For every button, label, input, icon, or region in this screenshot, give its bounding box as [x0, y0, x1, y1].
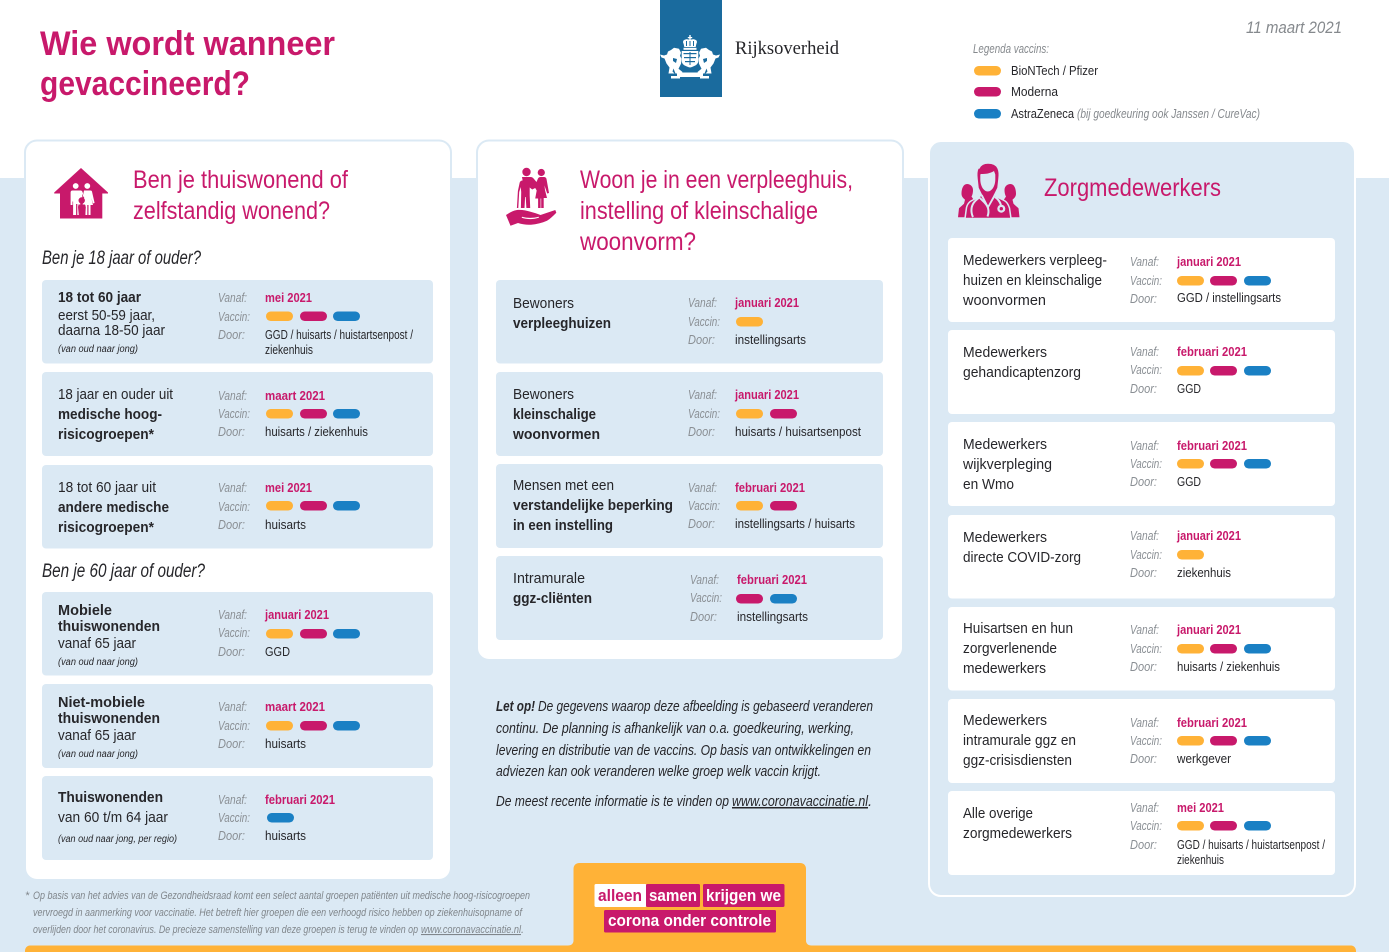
- row: mobiele thuiswonenden: vanaf 65 jaar: [58, 635, 136, 652]
- row: medische hoog-risicogroepen: 18 jaar en ouder uit: [58, 386, 174, 403]
- row: andere medische risicogroepen: [42, 465, 433, 548]
- row: bewoners verpleeghuizen: Bewoners: [513, 295, 574, 312]
- row: bewoners verpleeghuizen: [496, 280, 883, 364]
- footnote: vervroegd in aanmerking voor vaccinatie. Het betreft hier groepen die een verhoogd risico hebben op ziekenhuisopname of: [33, 907, 523, 919]
- row: alle overige zorgmedewerkers: Vanaf:: [1130, 800, 1159, 815]
- callout: let op: De gegevens waarop deze afbeelding is gebaseerd veranderen: [538, 698, 873, 715]
- row: intramurale ggz-clienten: instellingsarts: [737, 610, 808, 624]
- row: verstandelijke beperking: instellingsarts / huisarts: [735, 517, 855, 531]
- row: verpleeghuizen en kleinschalige woonvormen: Door:: [1130, 291, 1157, 306]
- row: gehandicaptenzorg: [948, 330, 1335, 414]
- legend: vaccines: AstraZeneca: [1011, 107, 1074, 121]
- row: huisartsen: medewerkers: [963, 660, 1046, 677]
- row: niet-mobiele thuiswonenden: huisarts: [265, 737, 306, 751]
- row: alle overige zorgmedewerkers: [948, 791, 1335, 875]
- row: medische hoog-risicogroepen: Vaccin:: [218, 406, 250, 421]
- row: alle overige zorgmedewerkers: ziekenhuis: [1177, 853, 1224, 867]
- icon: hand holding people: [506, 168, 556, 226]
- row: verpleeghuizen en kleinschalige woonvormen: [948, 238, 1335, 322]
- footnote: *: [25, 890, 30, 902]
- row: thuiswonenden 60 t/m 64: [42, 776, 433, 860]
- row: mobiele thuiswonenden: GGD: [265, 645, 290, 659]
- footnote: .: [521, 924, 524, 936]
- row: intramurale ggz en crisisdiensten: Door:: [1130, 751, 1157, 766]
- row: 18 tot 60 jaar: [42, 280, 433, 364]
- footnote: [25, 890, 530, 936]
- row: verpleeghuizen en kleinschalige woonvormen: Vanaf:: [1130, 254, 1159, 269]
- row: thuiswonenden 60 t/m 64: Thuiswonenden: [58, 789, 163, 806]
- row: niet-mobiele thuiswonenden: Niet-mobiele: [58, 694, 145, 711]
- row: bewoners verpleeghuizen: Vanaf:: [688, 295, 717, 310]
- row: verpleeghuizen en kleinschalige woonvormen: woonvormen: [962, 292, 1046, 309]
- title: gevaccineerd?: [40, 65, 250, 103]
- row: mobiele thuiswonenden: januari 2021: [264, 608, 329, 622]
- row: verpleeghuizen en kleinschalige woonvormen: GGD / instellingsarts: [1177, 291, 1281, 305]
- row: bewoners kleinschalige woonvormen: [496, 372, 883, 456]
- panel: thuiswonend: [25, 140, 451, 880]
- row: bewoners kleinschalige woonvormen: woonvormen: [512, 426, 600, 443]
- row: verstandelijke beperking: [496, 464, 883, 548]
- row: gehandicaptenzorg: Vanaf:: [1130, 344, 1159, 359]
- row: gehandicaptenzorg: Vaccin:: [1130, 362, 1162, 377]
- row: niet-mobiele thuiswonenden: Vaccin:: [218, 718, 250, 733]
- row: intramurale ggz en crisisdiensten: ggz-crisisdiensten: [963, 752, 1072, 769]
- row: medische hoog-risicogroepen: maart 2021: [265, 389, 325, 403]
- row: intramurale ggz-clienten: [496, 556, 883, 640]
- row: 18 tot 60 jaar: Vanaf:: [218, 290, 247, 305]
- row: wijkverpleging en Wmo: en Wmo: [963, 476, 1014, 493]
- row: intramurale ggz en crisisdiensten: werkgever: [1176, 752, 1231, 766]
- legend: vaccines: BioNTech / Pfizer: [1011, 64, 1098, 78]
- legend: vaccines: [973, 42, 1260, 121]
- row: huisartsen: januari 2021: [1176, 623, 1241, 637]
- row: intramurale ggz-clienten: februari 2021: [737, 573, 807, 587]
- row: alle overige zorgmedewerkers: Alle overige: [963, 805, 1033, 822]
- row: huisartsen: [948, 607, 1335, 690]
- row: intramurale ggz en crisisdiensten: Medewerkers: [963, 712, 1047, 729]
- row: niet-mobiele thuiswonenden: maart 2021: [265, 700, 325, 714]
- row: intramurale ggz en crisisdiensten: februari 2021: [1177, 716, 1247, 730]
- row: bewoners verpleeghuizen: Door:: [688, 332, 715, 347]
- row: bewoners kleinschalige woonvormen: Door:: [688, 424, 715, 439]
- row: intramurale ggz-clienten: Door:: [690, 609, 717, 624]
- row: verpleeghuizen en kleinschalige woonvormen: Medewerkers verpleeg-: [963, 252, 1107, 269]
- panel: zorgmedewerkers: [929, 141, 1355, 896]
- row: wijkverpleging en Wmo: Vanaf:: [1130, 438, 1159, 453]
- row: intramurale ggz en crisisdiensten: intramurale ggz en: [963, 732, 1076, 749]
- row: mobiele thuiswonenden: (van oud naar jong): [58, 657, 138, 668]
- row: verstandelijke beperking: Mensen met een: [513, 477, 614, 494]
- row: huisartsen: huisarts / ziekenhuis: [1177, 660, 1280, 674]
- icon: coat of arms: [660, 35, 720, 78]
- row: niet-mobiele thuiswonenden: Door:: [218, 736, 245, 751]
- row: 18 tot 60 jaar: Vaccin:: [218, 309, 250, 324]
- crown and shield drawn as simple shapes: [683, 35, 697, 47]
- row: mobiele thuiswonenden: thuiswonenden: [58, 618, 160, 635]
- row: bewoners kleinschalige woonvormen: januari 2021: [734, 388, 799, 402]
- row: medische hoog-risicogroepen: medische hoog-: [58, 406, 162, 423]
- row: wijkverpleging en Wmo: Medewerkers: [963, 436, 1047, 453]
- date: 11 maart 2021: [1246, 19, 1342, 37]
- row: andere medische risicogroepen: Vanaf:: [218, 480, 247, 495]
- row: andere medische risicogroepen: andere medische: [58, 499, 169, 516]
- heading: woonvorm?: [579, 228, 696, 256]
- footnote: overlijden door het coronavirus. De precieze samenstelling van deze groepen is terug te vinden op: [33, 924, 418, 936]
- heading: instelling of kleinschalige: [580, 197, 818, 225]
- row: alle overige zorgmedewerkers: Door:: [1130, 837, 1157, 852]
- side colleagues are drawn first so the central figure overlaps them: [958, 184, 974, 217]
- row: directe COVID-zorg: directe COVID-zorg: [963, 549, 1081, 566]
- heading: Ben je thuiswonend of: [133, 166, 348, 194]
- callout: let op: .: [868, 793, 872, 810]
- row: thuiswonenden 60 t/m 64: (van oud naar jong, per regio): [58, 834, 177, 845]
- row: verstandelijke beperking: Vanaf:: [688, 480, 717, 495]
- row: verpleeghuizen en kleinschalige woonvormen: Vaccin:: [1130, 273, 1162, 288]
- row: gehandicaptenzorg: Door:: [1130, 381, 1157, 396]
- callout: let op: levering en distributie van de vaccins. Op basis van ontwikkelingen en: [496, 742, 871, 759]
- row: 18 tot 60 jaar: mei 2021: [265, 291, 312, 305]
- title: Wie wordt wanneer: [40, 25, 335, 63]
- row: intramurale ggz-clienten: Intramurale: [513, 570, 585, 587]
- row: medische hoog-risicogroepen: huisarts / ziekenhuis: [265, 425, 368, 439]
- row: mobiele thuiswonenden: Mobiele: [58, 602, 112, 619]
- row: verstandelijke beperking: Door:: [688, 516, 715, 531]
- callout: let op: adviezen kan ook veranderen welke groep welk vaccin krijgt.: [496, 763, 821, 780]
- heading: Zorgmedewerkers: [1044, 174, 1221, 202]
- row: 18 tot 60 jaar: (van oud naar jong): [58, 344, 138, 355]
- row: mobiele thuiswonenden: [42, 592, 433, 676]
- row: niet-mobiele thuiswonenden: Vanaf:: [218, 699, 247, 714]
- orange band: [25, 863, 1356, 952]
- row: thuiswonenden 60 t/m 64: februari 2021: [265, 793, 335, 807]
- legend: vaccines: Legenda vaccins:: [973, 42, 1049, 56]
- row: huisartsen: Vaccin:: [1130, 641, 1162, 656]
- slogan: alleen: [598, 886, 642, 905]
- row: intramurale ggz-clienten: Vaccin:: [690, 590, 722, 605]
- row: intramurale ggz en crisisdiensten: Vaccin:: [1130, 733, 1162, 748]
- slogan: corona onder controle: [608, 911, 771, 930]
- logo wordmark: Rijksoverheid: [735, 38, 839, 59]
- row: niet-mobiele thuiswonenden: thuiswonenden: [58, 710, 160, 727]
- heading: Woon je in een verpleeghuis,: [580, 166, 853, 194]
- row: huisartsen: Vanaf:: [1130, 622, 1159, 637]
- callout: let op: [496, 698, 873, 810]
- row: verpleeghuizen en kleinschalige woonvormen: huizen en kleinschalige: [963, 272, 1102, 289]
- row: andere medische risicogroepen: Door:: [218, 517, 245, 532]
- row: huisartsen: zorgverlenende: [963, 640, 1057, 657]
- row: niet-mobiele thuiswonenden: (van oud naar jong): [58, 749, 138, 760]
- row: medische hoog-risicogroepen: Door:: [218, 424, 245, 439]
- callout: let op: continu. De planning is afhankelijk van o.a. goedkeuring, werking,: [496, 720, 854, 737]
- row: huisartsen: Huisartsen en hun: [963, 620, 1073, 637]
- row: thuiswonenden 60 t/m 64: Vanaf:: [218, 792, 247, 807]
- row: alle overige zorgmedewerkers: GGD / huisarts / huistartsenpost /: [1177, 838, 1325, 852]
- row: gehandicaptenzorg: Medewerkers: [963, 344, 1047, 361]
- row: 18 tot 60 jaar: 18 tot 60 jaar: [58, 289, 141, 306]
- subheading 18+: Ben je 18 jaar of ouder?: [42, 247, 201, 269]
- row: alle overige zorgmedewerkers: Vaccin:: [1130, 818, 1162, 833]
- row: andere medische risicogroepen: 18 tot 60 jaar uit: [58, 479, 157, 496]
- row: verstandelijke beperking: in een instelling: [513, 517, 613, 534]
- row: verstandelijke beperking: februari 2021: [735, 481, 805, 495]
- row: bewoners kleinschalige woonvormen: kleinschalige: [513, 406, 596, 423]
- row: thuiswonenden 60 t/m 64: van 60 t/m 64 jaar: [58, 809, 168, 826]
- row: thuiswonenden 60 t/m 64: Vaccin:: [218, 810, 250, 825]
- row: mobiele thuiswonenden: Vanaf:: [218, 607, 247, 622]
- row: 18 tot 60 jaar: Door:: [218, 327, 245, 342]
- logo: Rijksoverheid: [660, 0, 839, 97]
- row: verstandelijke beperking: verstandelijke beperking: [513, 497, 673, 514]
- card background: [25, 140, 451, 880]
- row: alle overige zorgmedewerkers: mei 2021: [1177, 801, 1224, 815]
- row: mobiele thuiswonenden: Vaccin:: [218, 625, 250, 640]
- row: directe COVID-zorg: Vaccin:: [1130, 547, 1162, 562]
- callout: let op: De meest recente informatie is te vinden op: [496, 793, 729, 810]
- row: bewoners verpleeghuizen: instellingsarts: [735, 333, 806, 347]
- row: wijkverpleging en Wmo: wijkverpleging: [962, 456, 1052, 473]
- row: alle overige zorgmedewerkers: zorgmedewerkers: [963, 825, 1072, 842]
- row: mobiele thuiswonenden: Door:: [218, 644, 245, 659]
- row: medische hoog-risicogroepen: [42, 372, 433, 456]
- icon: healthcare workers: [958, 163, 1020, 218]
- row: verpleeghuizen en kleinschalige woonvormen: januari 2021: [1176, 255, 1241, 269]
- row: huisartsen: Door:: [1130, 659, 1157, 674]
- row: gehandicaptenzorg: februari 2021: [1177, 345, 1247, 359]
- row: verstandelijke beperking: Vaccin:: [688, 498, 720, 513]
- title: [40, 25, 335, 103]
- row: 18 tot 60 jaar: daarna 18-50 jaar: [58, 322, 165, 339]
- slogan: [594, 884, 784, 932]
- row: gehandicaptenzorg: gehandicaptenzorg: [963, 364, 1081, 381]
- row: directe COVID-zorg: Medewerkers: [963, 529, 1047, 546]
- legend: vaccines: (bij goedkeuring ook Janssen / CureVac): [1077, 107, 1260, 121]
- legend: vaccines: Moderna: [1011, 85, 1058, 99]
- row: thuiswonenden 60 t/m 64: Door:: [218, 828, 245, 843]
- row: gehandicaptenzorg: GGD: [1177, 382, 1201, 396]
- card background: [929, 141, 1355, 896]
- row: wijkverpleging en Wmo: Door:: [1130, 474, 1157, 489]
- row: wijkverpleging en Wmo: [948, 422, 1335, 506]
- row: niet-mobiele thuiswonenden: vanaf 65 jaar: [58, 727, 136, 744]
- heading: [579, 166, 853, 256]
- row: andere medische risicogroepen: huisarts: [265, 518, 306, 532]
- row: bewoners verpleeghuizen: verpleeghuizen: [513, 315, 611, 332]
- row: bewoners kleinschalige woonvormen: Vaccin:: [688, 406, 720, 421]
- row: niet-mobiele thuiswonenden: [42, 684, 433, 768]
- row: andere medische risicogroepen: risicogroepen*: [58, 519, 154, 536]
- row: intramurale ggz en crisisdiensten: [948, 699, 1335, 783]
- row: bewoners kleinschalige woonvormen: huisarts / huisartsenpost: [735, 425, 861, 439]
- callout: let op: www.coronavaccinatie.nl: [732, 793, 869, 810]
- row: intramurale ggz-clienten: Vanaf:: [690, 572, 719, 587]
- subheading 60+: Ben je 60 jaar of ouder?: [42, 560, 205, 582]
- row: wijkverpleging en Wmo: GGD: [1177, 475, 1201, 489]
- slogan: krijgen we: [706, 886, 781, 905]
- heading: zelfstandig wonend?: [133, 197, 330, 225]
- callout: let op: Let op!: [496, 698, 535, 715]
- row: directe COVID-zorg: januari 2021: [1176, 529, 1241, 543]
- card background: [477, 140, 903, 660]
- footnote: Op basis van het advies van de Gezondheidsraad komt een select aantal groepen patiënten uit medische hoog-risicogroepen: [33, 890, 530, 902]
- row: medische hoog-risicogroepen: Vanaf:: [218, 388, 247, 403]
- row: directe COVID-zorg: Door:: [1130, 565, 1157, 580]
- row: 18 tot 60 jaar: ziekenhuis: [265, 343, 313, 357]
- row: bewoners verpleeghuizen: Vaccin:: [688, 314, 720, 329]
- icon: house with family: [54, 168, 108, 218]
- row: bewoners verpleeghuizen: januari 2021: [734, 296, 799, 310]
- heading: [133, 166, 348, 225]
- row: bewoners kleinschalige woonvormen: Vanaf:: [688, 387, 717, 402]
- row: 18 tot 60 jaar: GGD / huisarts / huistartsenpost /: [265, 328, 413, 342]
- row: directe COVID-zorg: [948, 515, 1335, 598]
- row: andere medische risicogroepen: mei 2021: [265, 481, 312, 495]
- logo blue block: [660, 0, 722, 97]
- row: bewoners kleinschalige woonvormen: Bewoners: [513, 386, 574, 403]
- panel: verpleeghuis: [477, 140, 903, 660]
- footer band with slogan tab: [25, 863, 1356, 952]
- row: wijkverpleging en Wmo: Vaccin:: [1130, 456, 1162, 471]
- row: directe COVID-zorg: ziekenhuis: [1177, 566, 1231, 580]
- row: directe COVID-zorg: Vanaf:: [1130, 528, 1159, 543]
- row: wijkverpleging en Wmo: februari 2021: [1177, 439, 1247, 453]
- footnote: www.coronavaccinatie.nl: [421, 924, 521, 936]
- row: 18 tot 60 jaar: eerst 50-59 jaar,: [58, 307, 155, 324]
- slogan: samen: [649, 886, 697, 905]
- row: medische hoog-risicogroepen: risicogroepen*: [58, 426, 154, 443]
- row: intramurale ggz-clienten: ggz-cliënten: [513, 590, 592, 607]
- row: intramurale ggz en crisisdiensten: Vanaf:: [1130, 715, 1159, 730]
- row: thuiswonenden 60 t/m 64: huisarts: [265, 829, 306, 843]
- row: andere medische risicogroepen: Vaccin:: [218, 499, 250, 514]
